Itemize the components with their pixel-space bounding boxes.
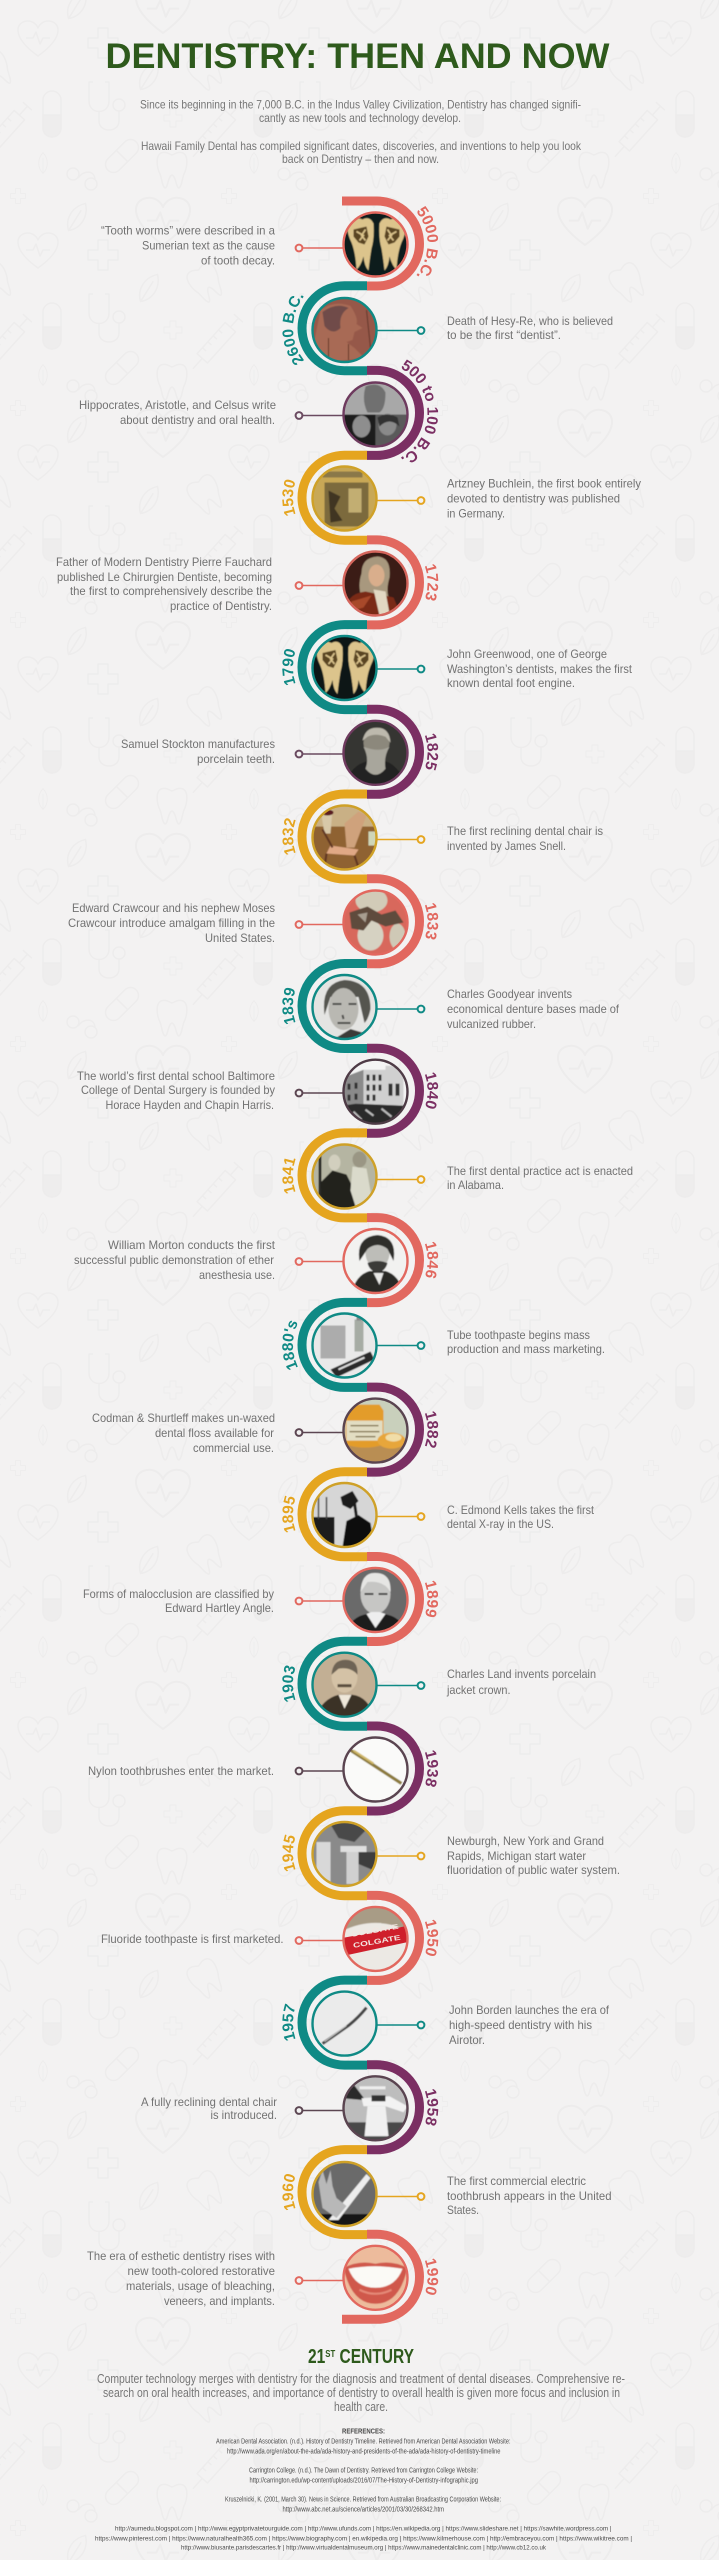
connector <box>376 1513 424 1520</box>
description: in Germany. <box>447 506 505 520</box>
connector <box>376 1342 424 1349</box>
photo: Colgate toothpaste: COLGATE <box>353 1935 402 1950</box>
description <box>447 1328 605 1356</box>
year label: 1958 <box>425 2089 438 2126</box>
description: Airotor. <box>449 2033 485 2047</box>
timeline item: 1841 <box>282 1128 633 1222</box>
timeline item: 1899 <box>83 1552 438 1646</box>
photo: water fluoridation machinery <box>312 1821 378 1887</box>
description: fluoridation of public water system. <box>447 1863 620 1877</box>
timeline item: 1950 <box>101 1890 438 1985</box>
description <box>447 647 633 690</box>
description <box>74 1238 276 1282</box>
timeline item: 1882 <box>92 1382 438 1477</box>
description <box>68 901 275 945</box>
arc band <box>367 1556 420 1642</box>
description: production and mass marketing. <box>447 1342 605 1356</box>
description: Father of Modern Dentistry Pierre Fauchard <box>56 555 272 569</box>
timeline item: 1938 <box>88 1722 438 1816</box>
description <box>141 2095 277 2122</box>
arc band <box>342 2234 420 2319</box>
timeline item: 1945 <box>282 1806 620 1900</box>
arc band <box>367 1387 420 1472</box>
description <box>101 224 275 268</box>
photo: Artzney Buchlein book <box>312 466 378 532</box>
description: United States. <box>205 931 275 945</box>
description <box>121 737 275 766</box>
photo: Charles Land portrait <box>312 1652 378 1718</box>
references: http://aurnedu.blogspot.com | http://www.egyptprivatetourguide.com | http://www.ufunds.com | https://en.wikipedia.org | https://www.slideshare.net | https://sawhite.wordpress.com | <box>115 2526 612 2532</box>
timeline item: 1825 <box>121 704 438 799</box>
arc band <box>367 1048 420 1133</box>
year label: 1903 <box>282 1666 296 1702</box>
description: dental X-ray in the US. <box>447 1517 554 1531</box>
description <box>87 2249 275 2308</box>
connector <box>376 1006 424 1012</box>
description <box>83 1587 274 1615</box>
arc band <box>302 1133 367 1218</box>
timeline item: 1723 <box>56 535 438 630</box>
description: C. Edmond Kells takes the first <box>447 1503 595 1517</box>
description: A fully reclining dental chair <box>141 2095 277 2109</box>
photo: fully reclining dental chair <box>342 2075 408 2142</box>
year label: 1846 <box>425 1242 438 1278</box>
photo: first dental X-ray <box>312 1482 378 1548</box>
description: practice of Dentistry. <box>170 599 272 613</box>
references: Kruszelnicki, K. (2001, March 30). News in Science. Retrieved from Australian Broadcasting Corporation Website: <box>225 2496 501 2504</box>
description: John Borden launches the era of <box>449 2003 610 2017</box>
connector <box>376 497 424 504</box>
arc band <box>302 2150 367 2235</box>
description: Horace Hayden and Chapin Harris. <box>106 1098 274 1112</box>
description: Newburgh, New York and Grand <box>447 1834 604 1848</box>
description <box>447 1503 595 1531</box>
connector <box>376 2022 424 2028</box>
arc band <box>367 1895 420 1980</box>
year label: 1723 <box>425 564 438 601</box>
description: invented by James Snell. <box>447 839 566 853</box>
connector <box>296 2277 344 2284</box>
connector <box>376 1853 424 1859</box>
description: Fluoride toothpaste is first marketed. <box>101 1932 284 1946</box>
description: materials, usage of bleaching, <box>126 2279 275 2293</box>
21st century text <box>97 2372 625 2414</box>
heading: 21st century: CENTURY <box>335 2346 415 2368</box>
description: Samuel Stockton manufactures <box>121 737 275 751</box>
references <box>95 2426 632 2552</box>
description: of tooth decay. <box>201 254 275 268</box>
timeline item: 500 to 100 B.C. <box>79 360 438 462</box>
arc band <box>367 370 420 455</box>
photo: Hippocrates, Aristotle, Celsus <box>342 382 408 448</box>
description: Tube toothpaste begins mass <box>447 1328 590 1342</box>
timeline item: 1840 <box>77 1044 438 1138</box>
description: Death of Hesy-Re, who is believed <box>447 314 613 328</box>
description: is introduced. <box>210 2108 277 2122</box>
description: jacket crown. <box>446 1683 510 1697</box>
photo: Charles Goodyear portrait <box>312 974 378 1040</box>
photo: Samuel Stockton portrait <box>342 720 408 786</box>
year label: 1957 <box>282 2004 296 2041</box>
arc band <box>367 1218 420 1303</box>
description <box>56 555 272 613</box>
timeline item: 1530 <box>282 450 641 545</box>
intro text: Since its beginning in the 7,000 B.C. in the Indus Valley Civilization, Dentistry has changed signifi- <box>140 98 581 112</box>
description: Rapids, Michigan start water <box>447 1849 586 1863</box>
references: http://www.abc.net.au/science/articles/2001/03/30/268342.htm <box>282 2506 444 2514</box>
description: about dentistry and oral health. <box>120 413 275 427</box>
references: http://www.biusante.parisdescartes.fr | http://www.virtualdentalmuseum.org | https://www.mainedentalclinic.com | http://www.cb12.co.uk <box>181 2544 547 2552</box>
arc band <box>367 1726 420 1811</box>
description: Washington’s dentists, makes the first <box>447 662 633 676</box>
arc band <box>302 964 367 1048</box>
description <box>92 1411 275 1455</box>
intro text <box>140 98 582 166</box>
arc band <box>302 1980 367 2065</box>
description <box>447 314 613 342</box>
connector <box>296 1937 344 1944</box>
connector <box>296 412 344 419</box>
description: dental floss available for <box>155 1426 274 1440</box>
description: Charles Land invents porcelain <box>447 1667 596 1681</box>
connector <box>296 1768 344 1774</box>
connector <box>296 751 344 757</box>
year label: 1882 <box>425 1411 438 1448</box>
timeline item: 1833 <box>68 874 438 968</box>
connector <box>296 1090 344 1096</box>
description: published Le Chirurgien Dentiste, becoming <box>57 570 272 584</box>
description: The world’s first dental school Baltimore <box>77 1069 275 1083</box>
photo: dental floss jar <box>342 1398 408 1465</box>
year label: 1880's <box>282 1320 298 1370</box>
description: porcelain teeth. <box>197 752 275 766</box>
year label: 1899 <box>425 1580 438 1618</box>
timeline item: 1903 <box>282 1636 596 1731</box>
photo: Edward Hartley Angle portrait <box>342 1567 408 1633</box>
timeline item: 1990 <box>87 2230 438 2324</box>
photo: smile <box>342 2245 408 2311</box>
references: REFERENCES: <box>342 2426 385 2436</box>
description: The first reclining dental chair is <box>447 824 603 838</box>
description <box>447 1164 633 1192</box>
arc band <box>302 794 367 879</box>
intro text: back on Dentistry – then and now. <box>282 152 439 166</box>
year label: 1938 <box>425 1750 438 1787</box>
description: College of Dental Surgery is founded by <box>81 1083 275 1097</box>
heading: 21st century: 21 <box>308 2346 330 2368</box>
description: successful public demonstration of ether <box>74 1253 274 1267</box>
description: William Morton conducts the first <box>108 1238 276 1252</box>
timeline item: 1790 <box>282 620 633 714</box>
timeline item: 1846 <box>74 1213 438 1308</box>
description <box>79 398 276 427</box>
timeline item: 1832 <box>282 790 603 884</box>
photo: reclining dental chair <box>312 804 378 870</box>
year label: 1895 <box>282 1496 296 1532</box>
description <box>446 1667 596 1697</box>
21st century text: search on oral health increases, and importance of dentistry to overall health is given more focus and inclusion in <box>103 2386 620 2400</box>
description: Edward Crawcour and his nephew Moses <box>72 901 275 915</box>
connector <box>296 582 344 589</box>
photo: Baltimore College building engraving <box>342 1059 408 1125</box>
description: Hippocrates, Aristotle, and Celsus write <box>79 398 276 412</box>
connector <box>296 921 344 928</box>
description: Edward Hartley Angle. <box>165 1601 274 1615</box>
connector <box>376 1176 424 1183</box>
timeline item: 1839 <box>282 959 620 1053</box>
description: The first commercial electric <box>447 2174 586 2188</box>
connector <box>376 666 424 672</box>
arc band <box>302 455 367 540</box>
photo: dental practice scene <box>312 1144 378 1210</box>
photo: ancient teeth <box>342 212 408 278</box>
description: States. <box>447 2203 479 2217</box>
timeline item: 1957 <box>282 1976 610 2070</box>
description: toothbrush appears in the United <box>447 2189 612 2203</box>
photo: Colgate toothpaste <box>342 1906 408 1972</box>
photo: nylon toothbrush <box>342 1736 408 1802</box>
references: https://www.pinterest.com | https://www.naturalhealth365.com | https://www.biography.com | en.wikipedia.org | https://www.kilmerhouse.com | http://embraceyou.com | https://www.wikitree.com | <box>95 2536 632 2542</box>
timeline item: 5000 B.C. <box>101 196 438 290</box>
description: high-speed dentistry with his <box>449 2018 592 2032</box>
timeline item: 1960 <box>282 2145 612 2240</box>
connector <box>296 1598 344 1604</box>
description <box>447 987 620 1031</box>
description: in Alabama. <box>447 1178 504 1192</box>
arc band <box>367 540 420 625</box>
photo: Hesy-Re relief <box>312 297 378 363</box>
photo: Airotor handpiece <box>312 1991 378 2057</box>
connector <box>376 327 424 334</box>
heading: 21st century: ST <box>325 2349 335 2360</box>
arc band <box>302 625 367 710</box>
arc band <box>302 1472 367 1557</box>
description: Nylon toothbrushes enter the market. <box>88 1764 274 1778</box>
description <box>447 1834 620 1877</box>
year label: 1832 <box>282 818 296 855</box>
references: http://carrington.edu/wp-content/uploads/2016/07/The-History-of-Dentistry-infographic.jpg <box>250 2478 478 2484</box>
description: known dental foot engine. <box>447 676 575 690</box>
description: Crawcour introduce amalgam filling in the <box>68 916 275 930</box>
arc band <box>302 1641 367 1726</box>
year label: 1841 <box>282 1158 296 1194</box>
arc band <box>367 709 420 794</box>
description: commercial use. <box>193 1441 274 1455</box>
connector <box>296 1258 344 1265</box>
year label: 1530 <box>282 480 296 516</box>
photo: William Morton engraving <box>342 1228 408 1294</box>
references: American Dental Association. (n.d.). History of Dentistry Timeline. Retrieved from American Dental Association Website: <box>216 2438 511 2446</box>
description: Codman & Shurtleff makes un-waxed <box>92 1411 275 1425</box>
connector <box>376 2193 424 2200</box>
description <box>447 476 641 520</box>
year label: 1990 <box>425 2258 438 2295</box>
description <box>447 2174 612 2217</box>
arc band <box>302 286 367 371</box>
timeline item: 1895 <box>282 1467 595 1562</box>
photo: tube toothpaste ad <box>312 1312 378 1378</box>
year label: 1825 <box>425 734 438 770</box>
year label: 1960 <box>282 2174 296 2210</box>
description: new tooth-colored restorative <box>128 2264 275 2278</box>
year label: 1833 <box>425 903 438 940</box>
photo: electric toothbrush <box>312 2161 378 2228</box>
year label: 1790 <box>282 649 296 686</box>
year label: 2600 B.C. <box>282 295 304 365</box>
timeline item: 1880's <box>282 1298 605 1392</box>
references: http://www.ada.org/en/about-the-ada/ada-history-and-presidents-of-the-ada/ada-history-of-dentistry-timeline <box>227 2448 501 2456</box>
description: Artzney Buchlein, the first book entirely <box>447 476 641 490</box>
year label: 500 to 100 B.C. <box>401 360 438 462</box>
description: to be the first “dentist”. <box>447 328 561 342</box>
year label: 5000 B.C. <box>416 206 438 276</box>
photo: teeth <box>312 635 378 701</box>
connector <box>296 245 344 251</box>
intro text: cantly as new tools and technology develop. <box>259 111 461 125</box>
intro text: Hawaii Family Dental has compiled significant dates, discoveries, and inventions to help you look <box>141 139 582 153</box>
arc band <box>302 1302 367 1387</box>
description: The era of esthetic dentistry rises with <box>87 2249 275 2263</box>
description: economical denture bases made of <box>447 1002 620 1016</box>
arc band <box>367 2065 420 2150</box>
description: anesthesia use. <box>199 1268 275 1282</box>
description: Sumerian text as the cause <box>142 238 275 252</box>
title: DENTISTRY: THEN AND NOW <box>106 37 610 76</box>
photo: amalgam filling <box>342 888 408 956</box>
year label: 1945 <box>282 1834 296 1872</box>
references: Carrington College. (n.d.). The Dawn of Dentistry. Retrieved from Carrington College Website: <box>249 2468 478 2474</box>
arc band <box>367 879 420 964</box>
description <box>77 1069 275 1112</box>
connector <box>376 836 424 843</box>
arc band <box>342 201 420 286</box>
year label: 1839 <box>282 988 296 1024</box>
description: Forms of malocclusion are classified by <box>83 1587 274 1601</box>
description <box>447 824 603 853</box>
21st century text: health care. <box>334 2400 388 2414</box>
description: John Greenwood, one of George <box>447 647 607 661</box>
description <box>449 2003 610 2047</box>
timeline item: 2600 B.C. <box>282 281 613 376</box>
arc band <box>302 1811 367 1896</box>
year label: 1840 <box>425 1072 438 1109</box>
year label: 1950 <box>425 1920 438 1956</box>
21st century text: Computer technology merges with dentistry for the diagnosis and treatment of dental diseases. Comprehensive re- <box>97 2372 625 2386</box>
photo: Pierre Fauchard portrait <box>342 550 408 616</box>
description: veneers, and implants. <box>164 2294 275 2308</box>
connector <box>376 1682 424 1689</box>
connector <box>296 1429 344 1436</box>
description: devoted to dentistry was published <box>447 492 620 506</box>
description: vulcanized rubber. <box>447 1017 536 1031</box>
description: “Tooth worms” were described in a <box>101 224 275 238</box>
connector <box>296 2107 344 2114</box>
description: The first dental practice act is enacted <box>447 1164 633 1178</box>
description: the first to comprehensively describe the <box>70 584 272 598</box>
photo: Colgate toothpaste: COLGATE <box>351 1924 400 1939</box>
description: Charles Goodyear invents <box>447 987 572 1001</box>
timeline item: 1958 <box>141 2060 438 2154</box>
